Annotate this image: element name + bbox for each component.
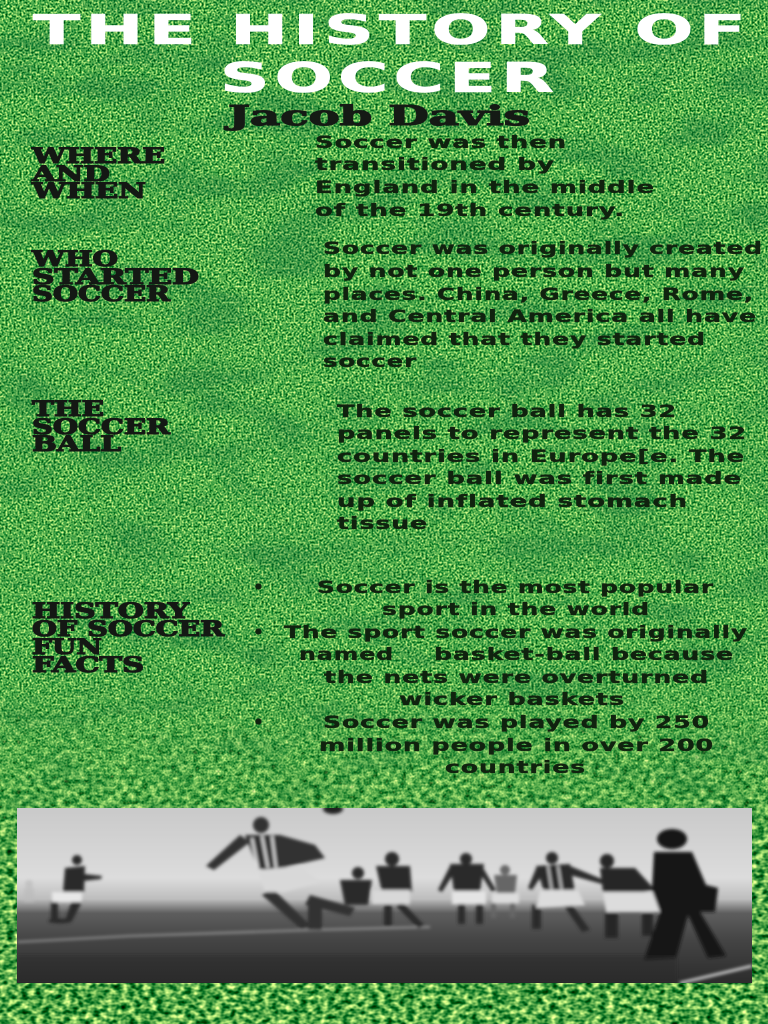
text block: who started soccer: places. China, Greece, Rome, <box>323 285 754 305</box>
text block: where and when <box>315 133 655 221</box>
title: SOCCER <box>220 54 559 102</box>
bulleted list: fun facts: • <box>253 623 264 643</box>
dark ground shading <box>644 956 672 960</box>
text block: who started soccer: Soccer was originally created <box>323 239 763 259</box>
title <box>33 6 751 102</box>
bulleted list: fun facts: • <box>253 578 264 598</box>
section heading: who started soccer: WHO <box>31 246 118 271</box>
section heading: where and when: AND <box>31 161 110 186</box>
section heading: the soccer ball: SOCCER <box>32 414 171 439</box>
bulleted list: fun facts: The sport soccer was originally <box>284 623 748 643</box>
bulleted list: fun facts: wicker baskets <box>399 690 625 710</box>
author name: Jacob Davis <box>225 101 530 132</box>
text block: the soccer ball: up of inflated stomach <box>337 492 688 512</box>
silhouette player <box>644 829 726 960</box>
crouching player <box>600 854 655 938</box>
text block: the soccer ball: panels to represent the 32 <box>337 424 747 444</box>
bulleted list: fun facts: basket-ball because <box>434 645 734 665</box>
section heading: where and when: WHEN <box>31 178 146 203</box>
distant player <box>26 880 32 892</box>
section heading: the soccer ball <box>32 396 171 456</box>
section heading: history of soccer fun facts: HISTORY <box>32 598 190 623</box>
bulleted list: fun facts: Soccer is the most popular <box>317 578 714 598</box>
section heading: history of soccer fun facts: OF SOCCER <box>32 616 225 641</box>
bulleted list: fun facts: million people in over 200 <box>319 736 714 756</box>
section heading: history of soccer fun facts <box>32 598 225 677</box>
section heading: the soccer ball: BALL <box>32 431 121 456</box>
photo: vintage soccer match <box>17 804 752 983</box>
text block: where and when: England in the middle <box>315 178 655 198</box>
section heading: the soccer ball: THE <box>32 396 104 421</box>
section heading: where and when: WHERE <box>31 143 165 168</box>
bulleted list: fun facts: sport in the world <box>382 600 650 620</box>
bulleted list: fun facts: countries <box>445 758 586 778</box>
text block: where and when: transitioned by <box>315 155 555 175</box>
ball <box>323 804 343 814</box>
text block: who started soccer: and Central America all have <box>323 307 757 327</box>
pitch corner line <box>680 966 752 983</box>
bulleted list: fun facts: Soccer was played by 250 <box>323 713 710 733</box>
far player <box>491 865 517 918</box>
text block: where and when: of the 19th century. <box>315 201 625 221</box>
bulleted list: fun facts: named <box>299 645 394 665</box>
striped player <box>528 852 604 932</box>
bulleted list: fun facts: the nets were overturned <box>324 668 709 688</box>
text block: who started soccer <box>323 239 763 372</box>
text block: where and when: Soccer was then <box>315 133 567 153</box>
section heading: history of soccer fun facts: FUN <box>32 634 102 659</box>
text block: who started soccer: by not one person but many <box>323 262 745 282</box>
bulleted list: fun facts: • <box>253 713 264 733</box>
jumping player <box>206 817 355 930</box>
text block: the soccer ball <box>337 402 747 534</box>
title: THE HISTORY OF <box>33 6 751 54</box>
central players <box>340 852 496 928</box>
text block: who started soccer: claimed that they started <box>323 330 706 350</box>
text block: the soccer ball: tissue <box>337 514 428 534</box>
player left <box>48 855 102 924</box>
text block: the soccer ball: soccer ball was first made <box>337 469 742 489</box>
section heading: who started soccer <box>31 246 199 306</box>
section heading: who started soccer: STARTED <box>32 264 199 289</box>
section heading: history of soccer fun facts: FACTS <box>32 652 144 677</box>
text block: who started soccer: soccer <box>323 352 417 372</box>
bulleted list: fun facts <box>253 578 748 778</box>
section heading: where and when <box>31 143 165 203</box>
text block: the soccer ball: countries in Europe[e. The <box>337 447 745 467</box>
section heading: who started soccer: SOCCER <box>32 281 171 306</box>
text block: the soccer ball: The soccer ball has 32 <box>337 402 677 422</box>
pitch line <box>17 927 430 942</box>
